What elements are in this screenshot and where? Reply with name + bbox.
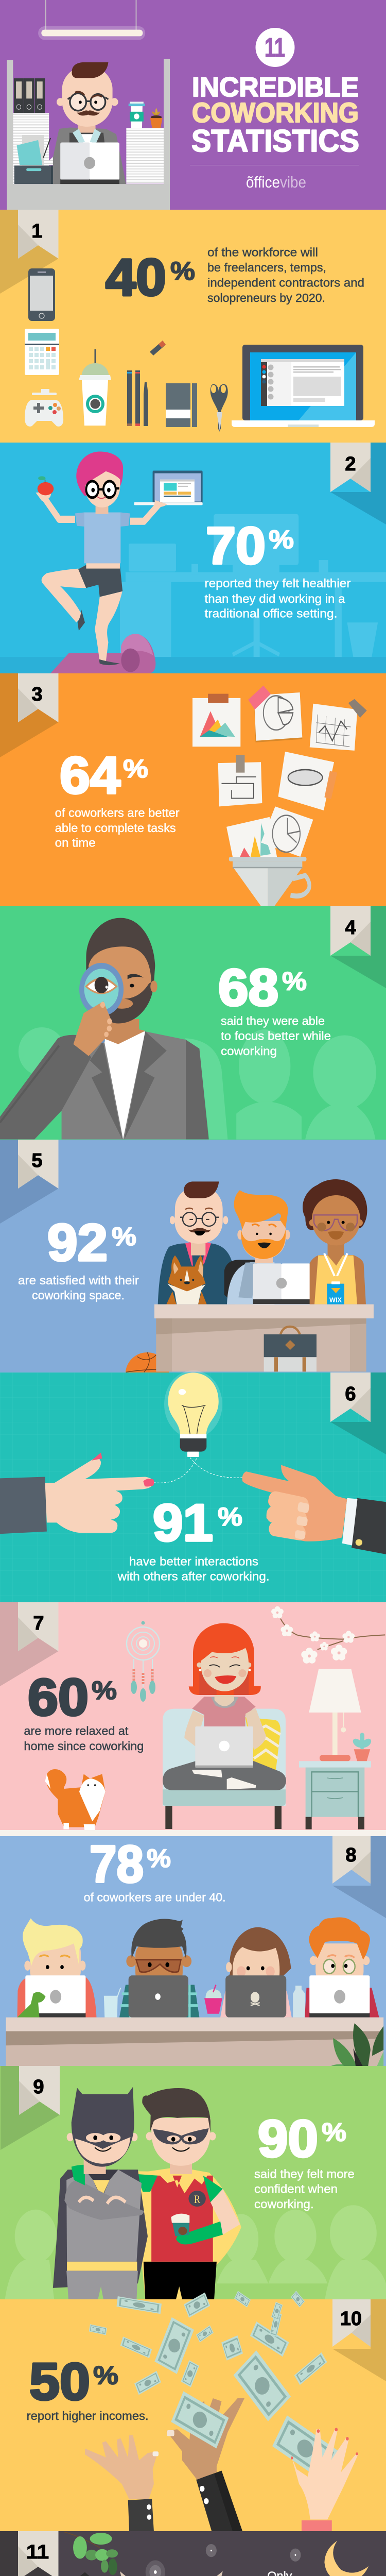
- icon: laptop with app: [232, 345, 375, 427]
- stat: 40%: independent contractors and: [207, 276, 364, 290]
- stat: 92%: are satisfied with their: [18, 1274, 139, 1287]
- stat: 50%: report higher incomes.: [27, 2409, 149, 2422]
- icon: calculator: [25, 329, 59, 375]
- stat: 60%: [24, 1669, 144, 1753]
- ribbon: number 1: 1: [31, 221, 43, 242]
- money bills: [89, 2291, 327, 2448]
- stat: 70%: traditional office setting.: [205, 607, 338, 620]
- illustration: man at cubicle desk: [7, 0, 170, 210]
- hand: right: [272, 2415, 358, 2531]
- stat: 91%: %: [218, 1502, 242, 1531]
- stat: 91%: have better interactions: [129, 1555, 258, 1568]
- ribbon: number 11: 11: [26, 2541, 49, 2563]
- stat: 78%: [84, 1836, 226, 1904]
- stat: 78%: %: [147, 1844, 171, 1873]
- ribbon: number 5: 5: [31, 1150, 43, 1172]
- stat: 68%: said they were able: [221, 1014, 325, 1027]
- stat: 70%: %: [269, 525, 294, 554]
- ribbon: number 9: [19, 2066, 60, 2115]
- illustration: three coworkers, dog and desk: [126, 1179, 374, 1396]
- ribbon: number 6: 6: [345, 1383, 356, 1405]
- stat: 70%: than they did working in a: [205, 592, 345, 605]
- stat: 64%: on time: [55, 836, 96, 850]
- stat: 91%: 91: [153, 1494, 213, 1552]
- title: INCREDIBLE: [192, 72, 359, 103]
- ribbon: number 10: [332, 2299, 371, 2347]
- rug edge: [0, 1830, 386, 1836]
- icon: pens: [127, 341, 166, 426]
- stat: 40%: be freelancers, temps,: [207, 261, 326, 274]
- stat: 50%: %: [93, 2361, 118, 2389]
- hand: left: [85, 2435, 159, 2531]
- stat: 50%: [27, 2353, 149, 2422]
- stat: 40%: of the workforce will: [207, 245, 318, 259]
- stat: 92%: %: [112, 1222, 136, 1251]
- panel: statistic 4: [0, 906, 386, 1140]
- stat: 90%: 90: [258, 2110, 318, 2168]
- stat: 70%: 70: [206, 517, 266, 575]
- background people silhouettes: [5, 2205, 386, 2299]
- panel: statistic 1: [0, 210, 386, 443]
- panel: statistic 10: [0, 2291, 386, 2531]
- stat: 60%: %: [92, 1676, 117, 1705]
- logo: officevibe: õfficevibe: [246, 173, 306, 191]
- stat: 92%: [18, 1214, 139, 1302]
- background office silhouette: [0, 514, 386, 673]
- panel: statistic 5: [0, 1140, 386, 1396]
- panel: statistic 6: [0, 1370, 386, 1602]
- icon: light bulb: [154, 1370, 242, 1483]
- illustration: lamp and bedside table: [299, 1669, 373, 1829]
- title: STATISTICS: [191, 124, 359, 158]
- ribbon: number 1: [18, 210, 59, 259]
- illustration: woman on armchair with laptop: [163, 1623, 286, 1829]
- stat: 70%: reported they felt healthier: [205, 577, 351, 590]
- stat: 91%: with others after coworking.: [117, 1569, 270, 1583]
- heading: 11 badge: [255, 28, 294, 67]
- panel: header: [0, 0, 386, 210]
- icon: smartphone: [28, 268, 55, 321]
- illustration: pinned charts falling into funnel: [192, 686, 367, 906]
- illustration: batman and robin: R: [194, 2194, 201, 2206]
- background people silhouettes: [19, 1027, 376, 1140]
- stat: 78%: of coworkers are under 40.: [84, 1891, 226, 1904]
- stat: 90%: said they felt more: [254, 2167, 355, 2180]
- ribbon: number 5: [18, 1140, 59, 1189]
- stat: 90%: confident when: [254, 2182, 338, 2196]
- panel: statistic 11: [0, 2531, 386, 2576]
- stat: 64%: %: [123, 754, 148, 783]
- stat: 64%: [55, 747, 180, 850]
- title: [191, 72, 359, 158]
- stat: 60%: are more relaxed at: [24, 1724, 129, 1738]
- panel: statistic 7: [0, 1602, 386, 1836]
- stat: 92%: 92: [47, 1214, 108, 1272]
- stat: 90%: %: [322, 2118, 346, 2147]
- ribbon: number 4: [330, 906, 371, 956]
- ribbon: number 7: [18, 1602, 59, 1651]
- stat: 68%: 68: [218, 959, 278, 1017]
- ribbon: number 7: 7: [33, 1613, 44, 1634]
- ribbon: number 6: [330, 1372, 371, 1422]
- panel: statistic 2: [0, 443, 386, 673]
- stat: 50%: 50: [29, 2353, 90, 2411]
- illustration: owl with laptop, lamp and moon: [0, 2532, 386, 2576]
- illustration: batman and robin: [53, 2087, 241, 2299]
- ribbon: number 9: 9: [33, 2076, 44, 2098]
- illustration: three coworkers, dog and desk: WIX: [329, 1297, 342, 1304]
- ribbon: number 8: 8: [345, 1844, 357, 1866]
- icon: iced drink cup: [79, 349, 111, 426]
- stat: 90%: coworking.: [254, 2197, 314, 2211]
- ribbon: number 3: [18, 673, 59, 722]
- stat: 60%: 60: [28, 1669, 89, 1726]
- stat: 68%: to focus better while: [221, 1029, 331, 1043]
- stat: 60%: home since coworking: [24, 1739, 144, 1753]
- ribbon: number 4: 4: [345, 917, 356, 939]
- title: COWORKING: [192, 97, 359, 128]
- stat: 40%: 40: [106, 249, 166, 307]
- ribbon: number 3: 3: [31, 684, 43, 705]
- stat: 70%: [205, 517, 351, 620]
- stat: 68%: %: [282, 967, 307, 996]
- stat: 40%: solopreneurs by 2020.: [207, 291, 325, 304]
- illustration: money raining on raised hands: [85, 2291, 358, 2531]
- ribbon: number 11: [18, 2531, 59, 2576]
- stat: 91%: [117, 1494, 270, 1583]
- illustration: bearded man with magnifying glass: [0, 918, 209, 1140]
- illustration: orange cat: [45, 1769, 106, 1833]
- heading: 11 badge: 11: [265, 33, 285, 63]
- stat: 68%: [218, 959, 331, 1058]
- ribbon: number 2: [330, 443, 371, 492]
- panel: statistic 3: [0, 673, 386, 906]
- stat: 64%: able to complete tasks: [55, 821, 176, 835]
- illustration: two pointing hands: [0, 1452, 386, 1554]
- illustration: blossom branch: [271, 1606, 385, 1664]
- ribbon: number 10: 10: [340, 2308, 362, 2330]
- panel: statistic 9: [0, 2066, 386, 2299]
- stat: 68%: coworking: [221, 1044, 277, 1058]
- stat: 64%: 64: [60, 747, 120, 805]
- stat: 64%: of coworkers are better: [55, 806, 180, 820]
- ribbon: number 2: 2: [345, 453, 356, 475]
- stat: 78%: 78: [90, 1836, 144, 1893]
- stat: 40%: %: [170, 257, 195, 285]
- illustration: four coworkers at desk: [6, 1917, 383, 2067]
- stat: 90%: [254, 2110, 355, 2211]
- icon: game controller: [25, 389, 63, 427]
- icon: notebook: [166, 383, 197, 427]
- ribbon: number 8: [332, 1836, 371, 1884]
- icon: scissors: [210, 384, 228, 432]
- stat: 40%: [106, 245, 364, 307]
- illustration: woman doing yoga with apple and laptop: [36, 452, 203, 673]
- illustration: dreamcatcher: [127, 1621, 160, 1702]
- hand: middle: [166, 2398, 244, 2531]
- panel: statistic 8: [0, 1836, 386, 2067]
- stat: 92%: coworking space.: [32, 1289, 125, 1302]
